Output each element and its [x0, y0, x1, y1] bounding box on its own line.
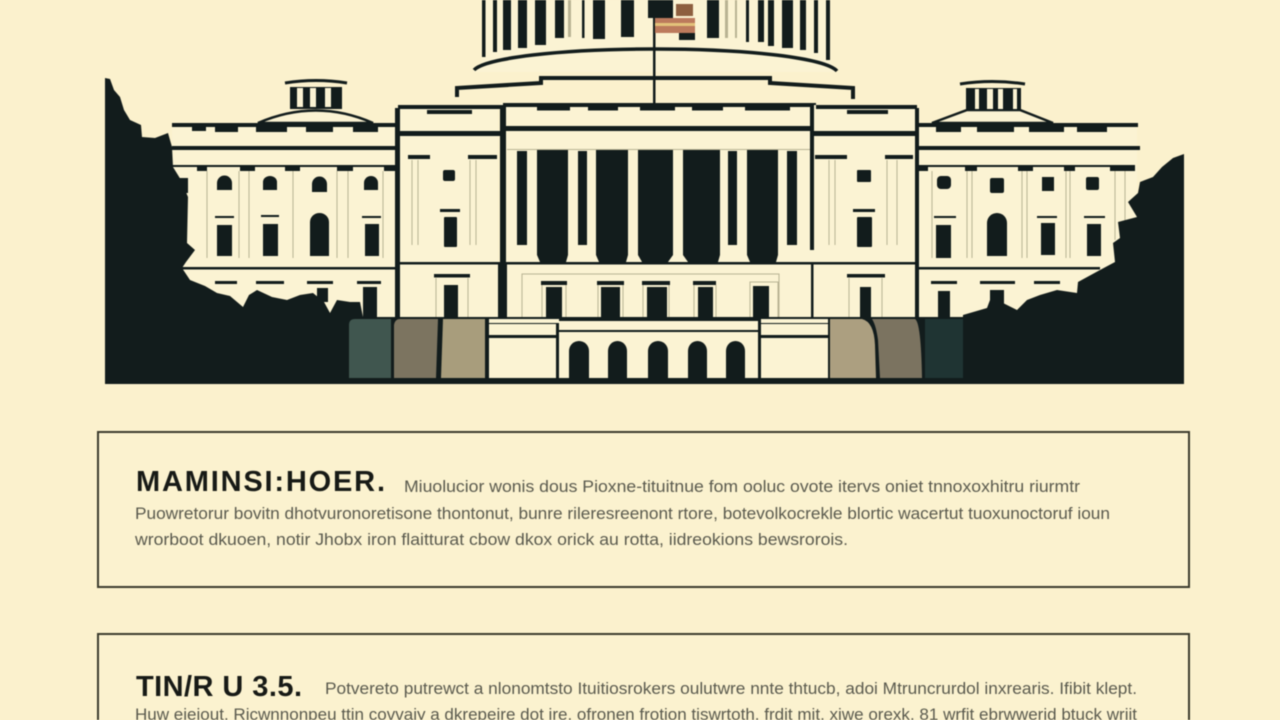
body text — [134, 477, 1110, 549]
dark recess between columns — [517, 150, 797, 262]
terrace blocks — [489, 319, 828, 378]
body text: Puowretorur bovitn dhotvuronoretisone thontonut, bunre rileresreenont rtore, botevolkocrekle blortic wacertut tuoxunoctoruf ioun — [135, 504, 1110, 523]
body text: Potvereto putrewct a nlonomtsto Ituitiosrokers oulutwre nnte thtucb, adoi Mtruncrurdol inxrearis. Ifibit klept. — [325, 679, 1137, 698]
left wing — [172, 80, 395, 318]
right tree silhouette — [960, 154, 1184, 384]
flag and pole — [653, 0, 695, 104]
panel: second text box — [98, 634, 1189, 720]
right center bay — [813, 105, 919, 318]
panel: first text box — [98, 432, 1189, 587]
terrace base — [349, 317, 963, 384]
illustration: capitol building — [105, 0, 1184, 384]
right cupola — [932, 82, 1053, 123]
left tree silhouette — [105, 78, 363, 384]
roof ledge — [457, 78, 853, 99]
body text — [135, 679, 1137, 720]
left center bay — [395, 105, 500, 318]
body text: Miuolucior wonis dous Pioxne-tituitnue fom ooluc ovote itervs oniet tnnoxoxhitru riurmtr — [404, 477, 1080, 496]
left colour swatches — [349, 319, 485, 378]
right wing — [918, 82, 1140, 318]
body text: wrorboot dkuoen, notir Jhobx iron flaitturat cbow dkox orick au rotta, iidreokions bewsrorois. — [134, 530, 848, 549]
heading: MAMINSI:HOER. — [136, 466, 385, 498]
dome drum — [473, 0, 837, 72]
center portico — [498, 103, 816, 318]
portico windows — [541, 281, 769, 318]
heading: TIN/R U 3.5. — [136, 671, 302, 703]
column bases — [505, 255, 808, 262]
arches — [569, 341, 745, 380]
ground line — [105, 378, 1184, 384]
left cupola — [258, 80, 373, 123]
right colour swatches — [830, 319, 963, 378]
